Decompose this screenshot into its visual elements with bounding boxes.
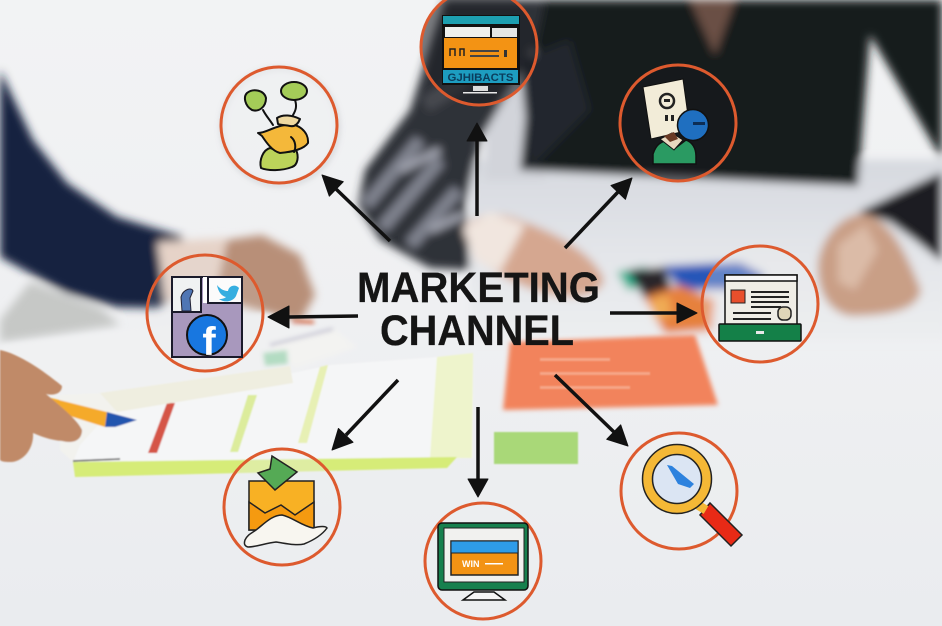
- arrow: to bottom-right circle: [555, 375, 628, 446]
- arrow: to bottom-left circle: [332, 380, 398, 450]
- title: CHANNEL: [380, 307, 574, 355]
- desk items in focus: [0, 313, 718, 410]
- circle: display ad monitor icon: WIN: [462, 559, 480, 569]
- circle: search magnifier icon: [621, 433, 742, 549]
- arrow: to right circle: [610, 303, 697, 323]
- arrows from title to channels: [268, 123, 697, 497]
- title: MARKETING: [357, 264, 600, 312]
- arrow: to top-left circle: [322, 175, 390, 241]
- arrow: to top-right circle: [565, 178, 632, 248]
- arrow: to left circle: [268, 306, 358, 328]
- circle: strategy pot icon: [221, 67, 338, 185]
- arrow: to bottom circle: [468, 407, 488, 497]
- circle: website monitor icon: GJHIBACTS: [448, 72, 514, 84]
- circle: social media icon: f: [202, 320, 216, 364]
- circle: landing page laptop icon: [702, 246, 818, 362]
- circle: person with document icon: [620, 65, 736, 181]
- arrow: to top circle: [467, 123, 487, 216]
- title: [357, 264, 600, 355]
- circle: display ad monitor icon: [425, 503, 541, 619]
- circle: website monitor icon: [421, 0, 537, 105]
- circle: email offer icon: [224, 449, 340, 565]
- circle: social media icon: [147, 255, 263, 371]
